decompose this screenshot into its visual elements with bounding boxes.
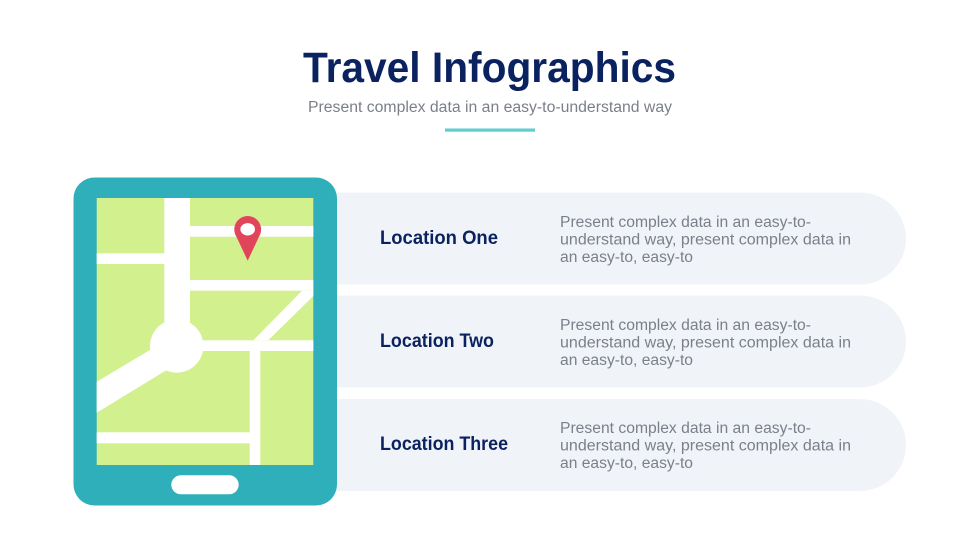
- description: location one: an easy-to, easy-to: [560, 249, 693, 266]
- description: location two: Present complex data in an easy-to-: [560, 317, 811, 334]
- icon: map pin: [234, 216, 261, 261]
- panel: location one: [330, 192, 906, 284]
- description: location three: Present complex data in an easy-to-: [560, 420, 811, 437]
- description: location two: an easy-to, easy-to: [560, 352, 693, 369]
- icon: tablet with map: [74, 178, 337, 506]
- heading: location one: Location One: [380, 228, 498, 249]
- panel: location two: [330, 296, 906, 388]
- subtitle: Present complex data in an easy-to-understand way: [308, 99, 672, 116]
- description: location one: [560, 214, 851, 266]
- description: location one: understand way, present complex data in: [560, 232, 851, 248]
- description: location one: Present complex data in an easy-to-: [560, 214, 811, 231]
- heading: location two: Location Two: [380, 331, 494, 352]
- map screen: [97, 198, 313, 465]
- description: location three: an easy-to, easy-to: [560, 455, 693, 472]
- heading: location three: Location Three: [380, 434, 508, 455]
- description: location two: [560, 317, 851, 369]
- description: location three: understand way, present complex data in: [560, 438, 851, 454]
- title accent underline: [445, 128, 535, 132]
- description: location three: [560, 420, 851, 472]
- title: Travel Infographics: [303, 44, 676, 92]
- tablet home button: [171, 475, 239, 494]
- description: location two: understand way, present complex data in: [560, 334, 851, 352]
- panel: location three: [330, 399, 906, 491]
